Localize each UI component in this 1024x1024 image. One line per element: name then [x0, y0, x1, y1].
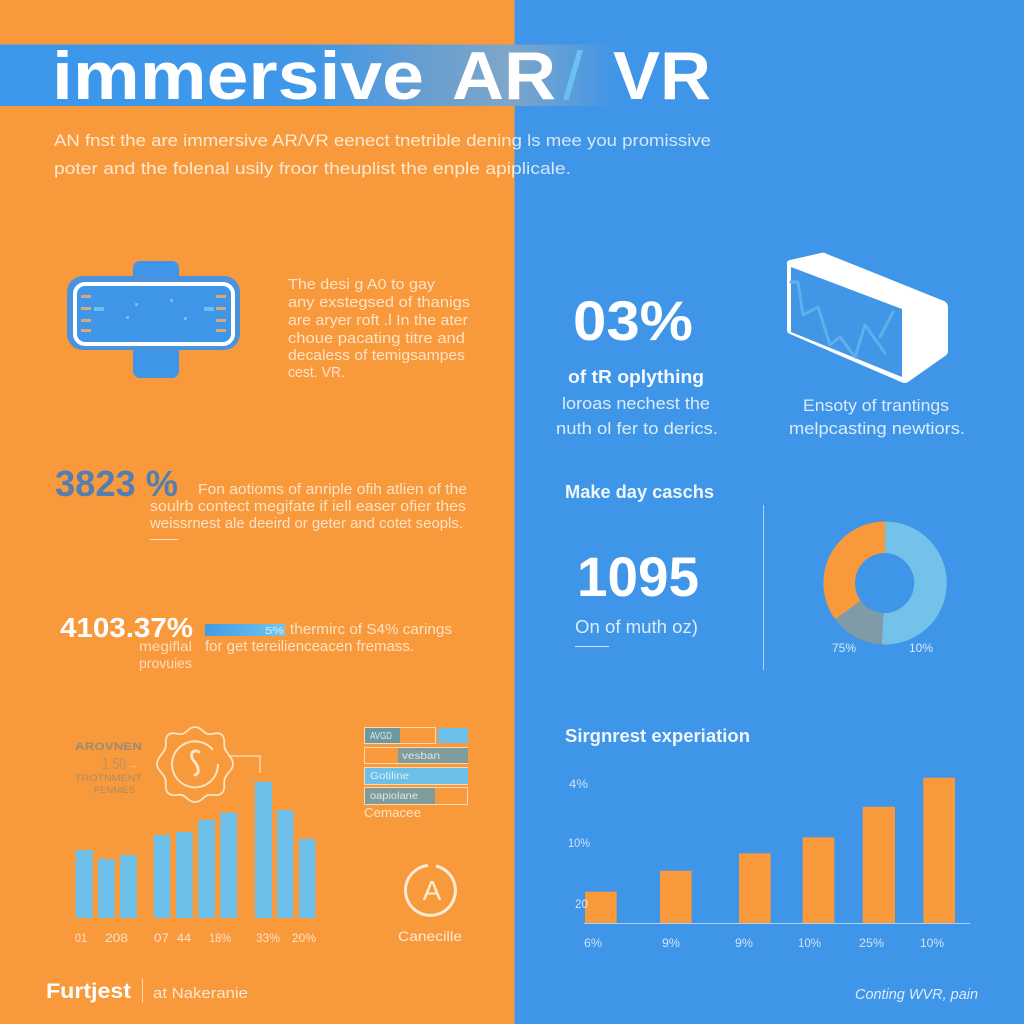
stat: 4103.37%: 4103.37% — [60, 612, 193, 643]
text block: stat 4103 description: thermirc of S4% carings — [290, 622, 452, 638]
donut chart: 75% — [832, 641, 856, 655]
footer: left: Furtjest — [46, 980, 131, 1003]
footer: left: at Nakeranie — [153, 986, 248, 1002]
bar chart: right: 9% — [662, 936, 680, 950]
bar chart: right: 10% — [920, 936, 944, 950]
stat: 4103.37% — [60, 612, 193, 671]
icon: VR headset — [67, 261, 240, 378]
progress bar — [205, 624, 285, 637]
legend: stacked rows — [364, 728, 468, 820]
text block: headset description — [288, 277, 470, 381]
text block: stat 3823 description: weissrnest ale deeird or geter and cotet seopls. — [149, 516, 463, 532]
bar chart: left: 33% — [256, 931, 280, 945]
heading: make day: Make day caschs — [565, 481, 714, 502]
stat: 03%: loroas nechest the — [562, 395, 710, 413]
text block: headset description: decaless of temigsampes — [288, 348, 465, 364]
text block: headset description: The desi g A0 to gay — [288, 277, 436, 293]
panel: blue background — [514, 0, 1024, 1024]
stat: 1095: 1095 — [577, 545, 699, 608]
subtitle text: poter and the folenal usily froor theuplist the enple apiplicale. — [54, 159, 571, 178]
text block: stat 4103 description — [205, 622, 452, 655]
text block: stat 3823 description — [149, 482, 467, 540]
title: AR — [452, 38, 556, 114]
bar chart: left: 07 — [154, 931, 169, 945]
text block: headset description: any exstegsed of thanigs — [288, 295, 470, 311]
stat: 03%: nuth ol fer to derics. — [556, 420, 718, 438]
legend: stacked rows: Gotiline — [370, 770, 409, 782]
stat: 3823%: 3823 % — [55, 463, 178, 504]
bar chart: left: 208 — [105, 931, 128, 945]
text block: stat 4103 description: for get tereilienceacen fremass. — [205, 639, 414, 655]
bar chart: left: 44 — [177, 931, 191, 945]
title: immersive — [52, 38, 424, 114]
title: VR — [613, 38, 711, 114]
donut chart — [823, 521, 947, 655]
legend: stacked rows: AVGD — [370, 730, 392, 742]
stat: 4103.37%: provuies — [139, 655, 192, 671]
stat: 03%: 03% — [573, 289, 693, 352]
progress bar: 5% — [265, 626, 284, 637]
callout: small label group: AROVNEN — [75, 741, 142, 753]
bar chart: left: 01 — [75, 931, 87, 945]
bar chart: right: 10% — [568, 836, 590, 850]
bar chart: left — [75, 782, 316, 945]
text block: screen caption — [789, 397, 965, 438]
title: / — [563, 38, 583, 114]
bar chart: left: 20% — [292, 931, 316, 945]
panel: orange background — [0, 0, 514, 1024]
bar chart: right — [568, 777, 970, 950]
callout: small label group — [75, 741, 143, 795]
text block: stat 3823 description: Fon aotioms of anriple ofih atlien of the — [198, 482, 467, 498]
bar chart: right: 25% — [859, 936, 884, 950]
bar chart: right: 10% — [798, 936, 821, 950]
footer: right: Conting WVR, pain — [855, 987, 978, 1003]
icon: 3D screen with line chart — [787, 253, 948, 383]
bar chart: right: 20 — [575, 897, 588, 911]
bar chart: right: 9% — [735, 936, 753, 950]
stat: 03% — [556, 289, 718, 438]
donut chart: 10% — [909, 641, 933, 655]
heading: bar chart: Sirgnrest experiation — [565, 725, 750, 746]
icon: circled A: Canecille — [398, 928, 462, 944]
stat: 1095: On of muth oz) — [575, 616, 698, 637]
bar chart: right: 4% — [569, 777, 588, 791]
legend: stacked rows: Cemacee — [364, 805, 421, 820]
subtitle text — [54, 131, 711, 178]
stat: 4103.37%: megiflal — [139, 638, 192, 654]
text block: headset description: are aryer roft .l In the ater — [288, 313, 468, 329]
title band — [0, 44, 620, 106]
text block: screen caption: Ensoty of trantings — [803, 397, 949, 415]
icon: gear badge — [157, 727, 260, 802]
callout: small label group: PENNIES — [94, 785, 135, 795]
callout: small label group: → — [128, 760, 137, 771]
text block: headset description: choue pacating titre and — [288, 331, 465, 347]
callout: small label group: 1.50 — [102, 756, 126, 773]
icon: circled A: A — [423, 875, 442, 906]
footer: left — [46, 978, 248, 1003]
subtitle text: AN fnst the are immersive AR/VR eenect tnetrible dening ls mee you promissive — [54, 131, 711, 150]
stat: 1095 — [575, 545, 699, 647]
text block: stat 3823 description: soulrb contect megifate if iell easer ofier thes — [150, 499, 466, 515]
text block: headset description: cest. VR. — [288, 365, 345, 381]
title — [52, 38, 711, 114]
bar chart: right: 6% — [584, 936, 602, 950]
legend: stacked rows: oapiolane — [370, 790, 418, 802]
text block: screen caption: melpcasting newtiors. — [789, 420, 965, 438]
icon: circled A — [398, 866, 462, 944]
bar chart: left: 18% — [209, 931, 231, 945]
callout: small label group: TROTNMENT — [75, 773, 143, 783]
legend: stacked rows: vesban — [402, 750, 440, 762]
stat: 03%: of tR oplything — [568, 366, 704, 387]
